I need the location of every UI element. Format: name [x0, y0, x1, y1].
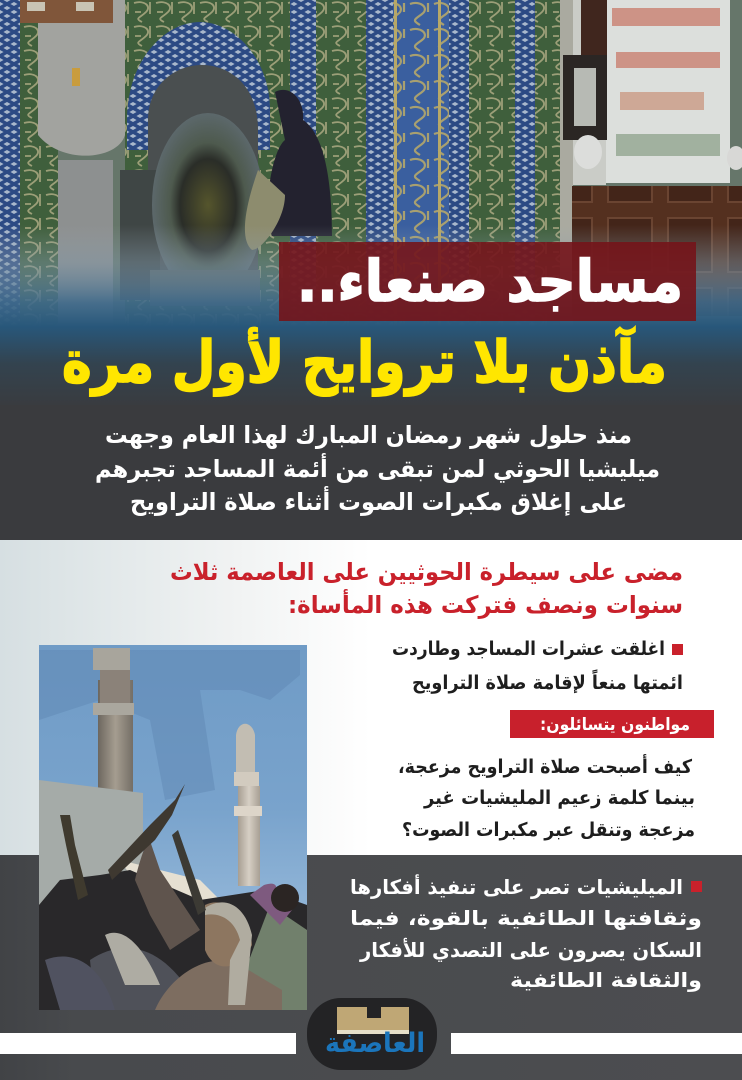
title line one: مساجد صنعاء..: [297, 249, 683, 315]
bullet: militias insist: السكان يصرون على التصدي للأفكار: [359, 937, 702, 963]
yellow subtitle: مآذن بلا تروايح لأول مرة: [62, 326, 667, 397]
icon: mihrab arch: [120, 0, 272, 340]
dark intro band: [0, 405, 742, 540]
intro paragraph: ميليشيا الحوثي لمن تبقى من أئمة المساجد تجبرهم: [95, 453, 660, 483]
minaret left: [93, 648, 134, 792]
header photo: mosque interior: [0, 0, 742, 360]
question text: كيف أصبحت صلاة التراويح مزعجة،: [398, 754, 693, 778]
grey wall: [39, 780, 143, 1000]
logo wordmark: العاصفة: [325, 1028, 425, 1059]
wooden cabinet: [572, 186, 742, 316]
bullet: militias insist: [350, 873, 702, 992]
bullet: closed mosques: [392, 638, 683, 694]
intro paragraph: منذ حلول شهر رمضان المبارك لهذا العام وجهت: [105, 421, 632, 449]
stone pillar: [20, 0, 125, 340]
bullet: militias insist: والثقافة الطائفية: [510, 968, 702, 992]
citizens label: مواطنون يتسائلون:: [540, 715, 690, 735]
footer bar left: [0, 1033, 296, 1054]
icon: buildings: [337, 1007, 409, 1034]
figure at the mihrab: [245, 90, 332, 250]
header fade: [0, 225, 742, 410]
question text: بينما كلمة زعيم المليشيات غير: [423, 787, 695, 809]
logo: [307, 998, 437, 1070]
question text: [398, 754, 695, 841]
banner with slogans: [606, 0, 730, 183]
bullet: closed mosques: ائمتها منعاً لإقامة صلاة التراويح: [412, 669, 683, 694]
wall panels and frame: [563, 0, 742, 185]
rifle: [108, 784, 185, 880]
title box: [279, 242, 696, 321]
red heading: [170, 558, 683, 619]
lower dark panel: [0, 855, 742, 1080]
red heading: سنوات ونصف فتركت هذه المأساة:: [288, 589, 683, 619]
citizens label: [510, 710, 714, 738]
crowd: [39, 870, 307, 1010]
bullet: militias insist: الميليشيات تصر على تنفيذ أفكارها: [350, 873, 683, 899]
red heading: مضى على سيطرة الحوثيين على العاصمة ثلاث: [170, 558, 683, 586]
question text: مزعجة وتنقل عبر مكبرات الصوت؟: [402, 819, 695, 841]
light content panel: [0, 540, 742, 856]
intro paragraph: [95, 421, 660, 516]
minaret right: [234, 724, 262, 886]
photo: gunmen and minarets: [39, 645, 307, 1010]
intro paragraph: على إغلاق مكبرات الصوت أثناء صلاة التراويح: [130, 486, 627, 516]
bullet: closed mosques: اغلقت عشرات المساجد وطاردت: [392, 638, 665, 660]
footer bar right: [451, 1033, 742, 1054]
bullet: militias insist: وثقافتها الطائفية بالقوة، فيما: [350, 906, 702, 930]
